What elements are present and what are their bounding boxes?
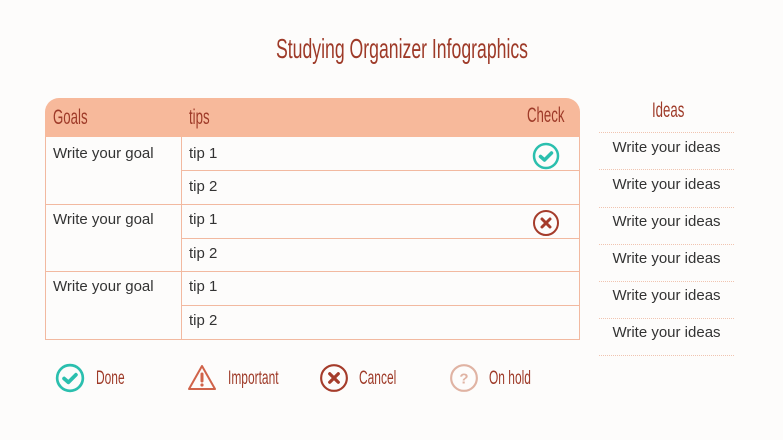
legend: On hold bbox=[489, 368, 531, 389]
icon: check done bbox=[532, 142, 560, 170]
text: Write your ideas bbox=[612, 213, 721, 230]
table body: tip 2 bbox=[189, 245, 217, 262]
legend: on hold bbox=[450, 364, 478, 392]
table body: tip 1 bbox=[189, 211, 217, 228]
table body: tip 1 bbox=[189, 278, 217, 295]
table body: Write your goal bbox=[53, 145, 154, 162]
table header: tips bbox=[189, 106, 210, 129]
legend: Important bbox=[228, 368, 279, 389]
text: Write your ideas bbox=[612, 287, 721, 304]
table header: Check bbox=[527, 104, 565, 127]
legend: important bbox=[188, 365, 216, 390]
table body bbox=[45, 137, 580, 340]
text: Write your ideas bbox=[612, 250, 721, 267]
table header: Goals bbox=[53, 106, 88, 129]
legend: Cancel bbox=[359, 368, 396, 389]
text: Write your ideas bbox=[612, 324, 721, 341]
text: Write your ideas bbox=[612, 139, 721, 156]
table body: Write your goal bbox=[53, 211, 154, 228]
table body: tip 2 bbox=[189, 178, 217, 195]
icon: cancel bbox=[533, 210, 559, 236]
text: Write your ideas bbox=[612, 176, 721, 193]
table header bbox=[45, 98, 580, 137]
table body: tip 2 bbox=[189, 312, 217, 329]
legend: cancel bbox=[320, 364, 348, 392]
table body: tip 1 bbox=[189, 145, 217, 162]
title: Studying Organizer Infographics bbox=[276, 33, 528, 64]
legend: done bbox=[56, 364, 84, 392]
legend: Done bbox=[96, 368, 125, 389]
ideas panel: Ideas bbox=[652, 99, 684, 122]
table body: Write your goal bbox=[53, 278, 154, 295]
table bbox=[45, 98, 580, 340]
legend bbox=[56, 364, 531, 392]
legend: on hold: ? bbox=[459, 370, 469, 387]
